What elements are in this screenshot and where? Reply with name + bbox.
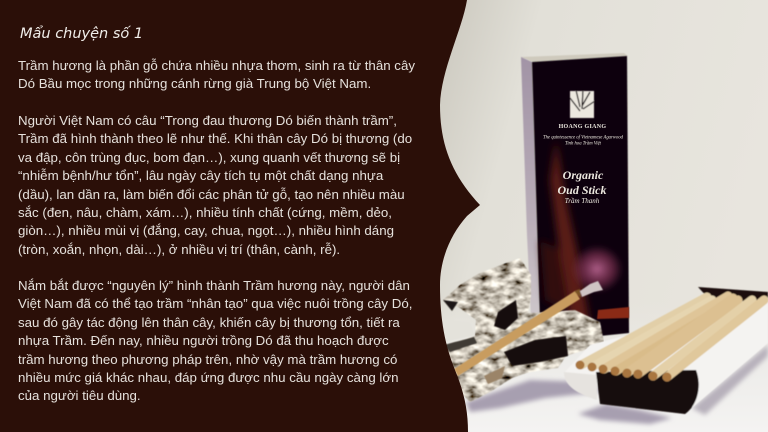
paragraph 3: Việt Nam đã có thể tạo trầm “nhân tạo” qua việc nuôi trồng cây Dó, [18,296,412,311]
paragraph 3: sau đó gây tác động lên thân cây, khiến cây bị thương tổn, tiết ra [18,315,400,330]
paragraph 2 [18,113,412,257]
box logo [570,90,595,118]
paragraph 3: của người tiêu dùng. [18,388,141,403]
paragraph 2: Người Việt Nam có câu “Trong đau thương Dó biến thành trầm”, [18,113,397,128]
paragraph 2: va đập, côn trùng đục, bom đạn…), xung quanh vết thương sẽ bị [18,150,400,165]
paragraph 3: Nắm bắt được “nguyên lý” hình thành Trầm hương này, người dân [18,278,410,293]
paragraph 2: giòn…), nhiều mùi vị (đắng, cay, chua, ngọt…), nhiều hình dáng [18,223,394,238]
paragraph 3: nhựa Trầm. Đến nay, nhiều người trồng Dó đã thu hoạch được [18,333,389,348]
shadows [466,345,768,424]
box label: The quintessence of Vietnamese Agarwood [543,136,624,140]
paragraph 1: Dó Bầu mọc trong những cánh rừng già Trung bộ Việt Nam. [18,76,371,91]
paragraph 3 [18,278,412,403]
incense box [521,53,629,337]
title: Mẩu chuyện số 1 [20,26,143,42]
box label: Organic [563,168,604,182]
paragraph 2: “nhiễm bệnh/hư tổn”, lâu ngày cây tích tụ một chất dạng nhựa [18,168,383,183]
box label [543,124,624,205]
agarwood pieces [440,258,604,402]
lit incense stick [454,281,603,376]
paragraph 1 [18,58,415,91]
curved dark brown panel [0,0,480,432]
box label: Oud Stick [557,183,607,197]
paragraph 2: sắc (đen, nâu, chàm, xám…), nhiều tính chất (cứng, mềm, dẻo, [18,205,392,220]
paragraph 2: (tròn, xoắn, nhọn, dài…), ở nhiều vị trí (thân, cành, rễ). [18,242,340,257]
paragraph 3: nhiều mức giá khác nhau, đáp ứng được nhu cầu ngày càng lớn [18,370,399,385]
paragraph 3: trầm hương theo phương pháp trên, nhờ vậy mà trầm hương có [18,352,397,367]
open tray of incense sticks [564,287,768,414]
box label: Tinh hoa Trầm Việt [565,142,602,146]
paragraph 2: Trầm đã hình thành theo lẽ như thế. Khi thân cây Dó bị thương (do [18,131,412,146]
box label: HOANG GIANG [559,124,606,130]
paragraph 2: (dầu), lan dần ra, làm biến đổi các phân tử gỗ, tạo nên nhiều màu [18,187,405,202]
paragraph 1: Trầm hương là phần gỗ chứa nhiều nhựa thơm, sinh ra từ thân cây [18,58,415,73]
box label: Trầm Thanh [565,197,600,205]
